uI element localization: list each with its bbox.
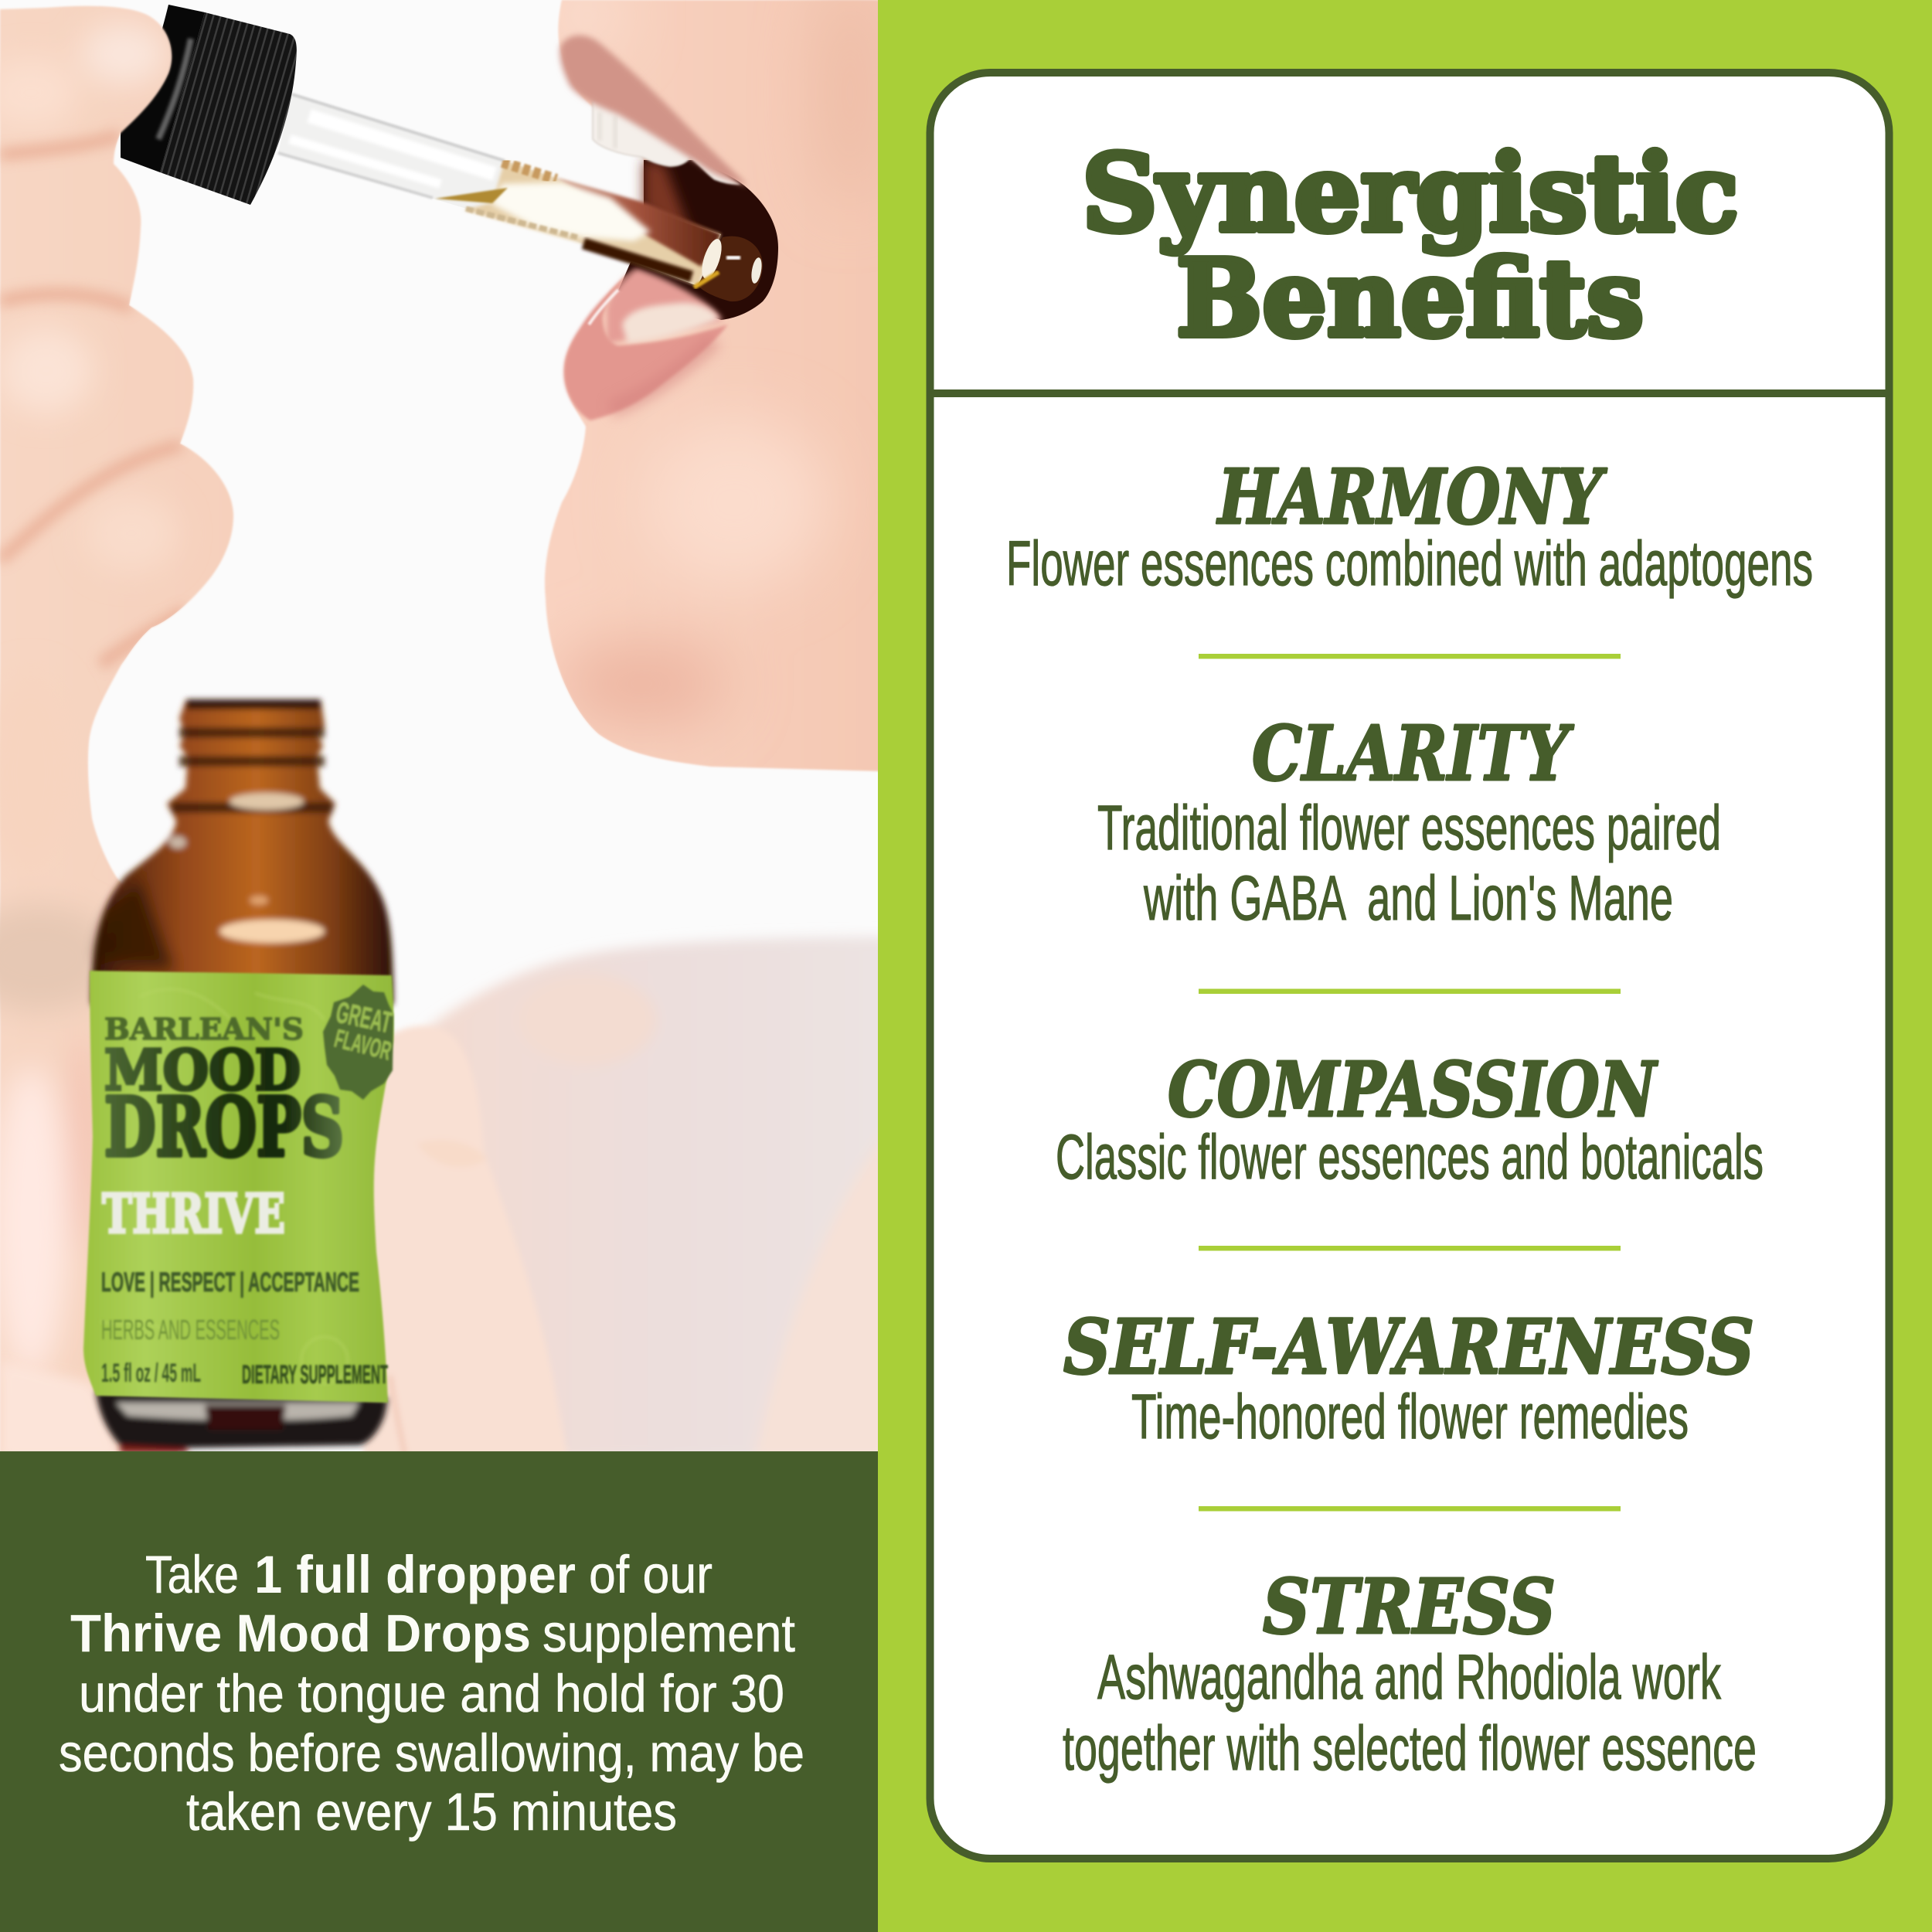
bottle glass xyxy=(91,699,393,1005)
benefit: compassion: COMPASSION xyxy=(1168,1046,1658,1134)
glass tube xyxy=(278,94,721,286)
benefit: clarity xyxy=(1097,709,1721,934)
face: lips and chin xyxy=(545,0,881,771)
photo: woman taking drops xyxy=(0,0,889,1461)
great flavor badge xyxy=(323,985,394,1100)
panel: benefits card xyxy=(930,73,1889,1859)
title: Benefits xyxy=(1176,236,1644,361)
great flavor badge: GREAT xyxy=(333,996,394,1040)
faint label leaf pattern xyxy=(100,989,348,1383)
blurred shoulder xyxy=(427,937,889,1461)
knurled cap xyxy=(160,12,297,205)
benefit: self-awareness xyxy=(1063,1303,1754,1452)
benefit: stress xyxy=(1063,1563,1757,1784)
liquid: cream middle xyxy=(464,161,721,286)
directions line 2: Thrive Mood Drops xyxy=(70,1604,531,1663)
bottle label text: THRIVE xyxy=(102,1182,285,1246)
lower palm fade xyxy=(2,1364,120,1451)
label xyxy=(83,971,394,1403)
bottle label text: MOOD xyxy=(104,1037,301,1103)
directions line 1: of our xyxy=(589,1545,713,1604)
benefit: clarity: with GABA and Lion's Mane xyxy=(1143,863,1673,934)
benefit: harmony: HARMONY xyxy=(1216,453,1607,541)
directions line 2 xyxy=(70,1604,795,1663)
bottle base xyxy=(96,1391,388,1453)
bottle label text: 1.5 fl oz / 45 mL xyxy=(101,1359,201,1388)
mouth interior xyxy=(607,160,778,344)
benefit: stress: STRESS xyxy=(1263,1563,1556,1651)
directions line 3: under the tongue and hold for 30 xyxy=(79,1664,784,1723)
bottle label text xyxy=(101,1012,388,1389)
directions line 1: Take xyxy=(145,1545,239,1604)
title xyxy=(1082,131,1739,361)
directions line 1 xyxy=(145,1545,713,1604)
directions line 4: seconds before swallowing, may be xyxy=(59,1723,804,1783)
great flavor badge: FLAVOR xyxy=(332,1025,394,1066)
blurred thumb beside the bottle xyxy=(360,1026,568,1461)
bottle label text: LOVE | RESPECT | ACCEPTANCE xyxy=(101,1267,359,1298)
panel: directions xyxy=(0,1451,878,1932)
title: Synergistic xyxy=(1082,131,1739,256)
directions line 5: taken every 15 minutes xyxy=(186,1782,677,1842)
glossy collar xyxy=(121,5,205,172)
amber bottle xyxy=(83,699,394,1453)
benefit: compassion xyxy=(1056,1046,1764,1192)
hand holding dropper and bottle xyxy=(0,6,233,1461)
bottle label text: DROPS xyxy=(104,1080,344,1175)
label: DIETARY SUPPLEMENT xyxy=(242,1360,388,1389)
header divider xyxy=(930,389,1889,397)
benefit: self-awareness: SELF-AWARENESS xyxy=(1063,1303,1754,1391)
lower lip xyxy=(564,268,728,420)
dropper tip xyxy=(698,236,763,301)
benefit: clarity: CLARITY xyxy=(1252,709,1574,798)
directions line 1: 1 full dropper xyxy=(254,1545,576,1604)
upper lip xyxy=(560,36,748,185)
dropper: cap and glass pipette xyxy=(121,5,764,301)
benefit: harmony xyxy=(1006,453,1813,599)
directions line 2: supplement xyxy=(543,1604,795,1663)
finger shading and creases xyxy=(0,23,185,1376)
photo background xyxy=(0,0,878,1451)
bottle label text: HERBS AND ESSENCES xyxy=(101,1314,280,1345)
bottle label text: BARLEAN'S xyxy=(104,1012,304,1046)
upper teeth xyxy=(593,100,738,184)
